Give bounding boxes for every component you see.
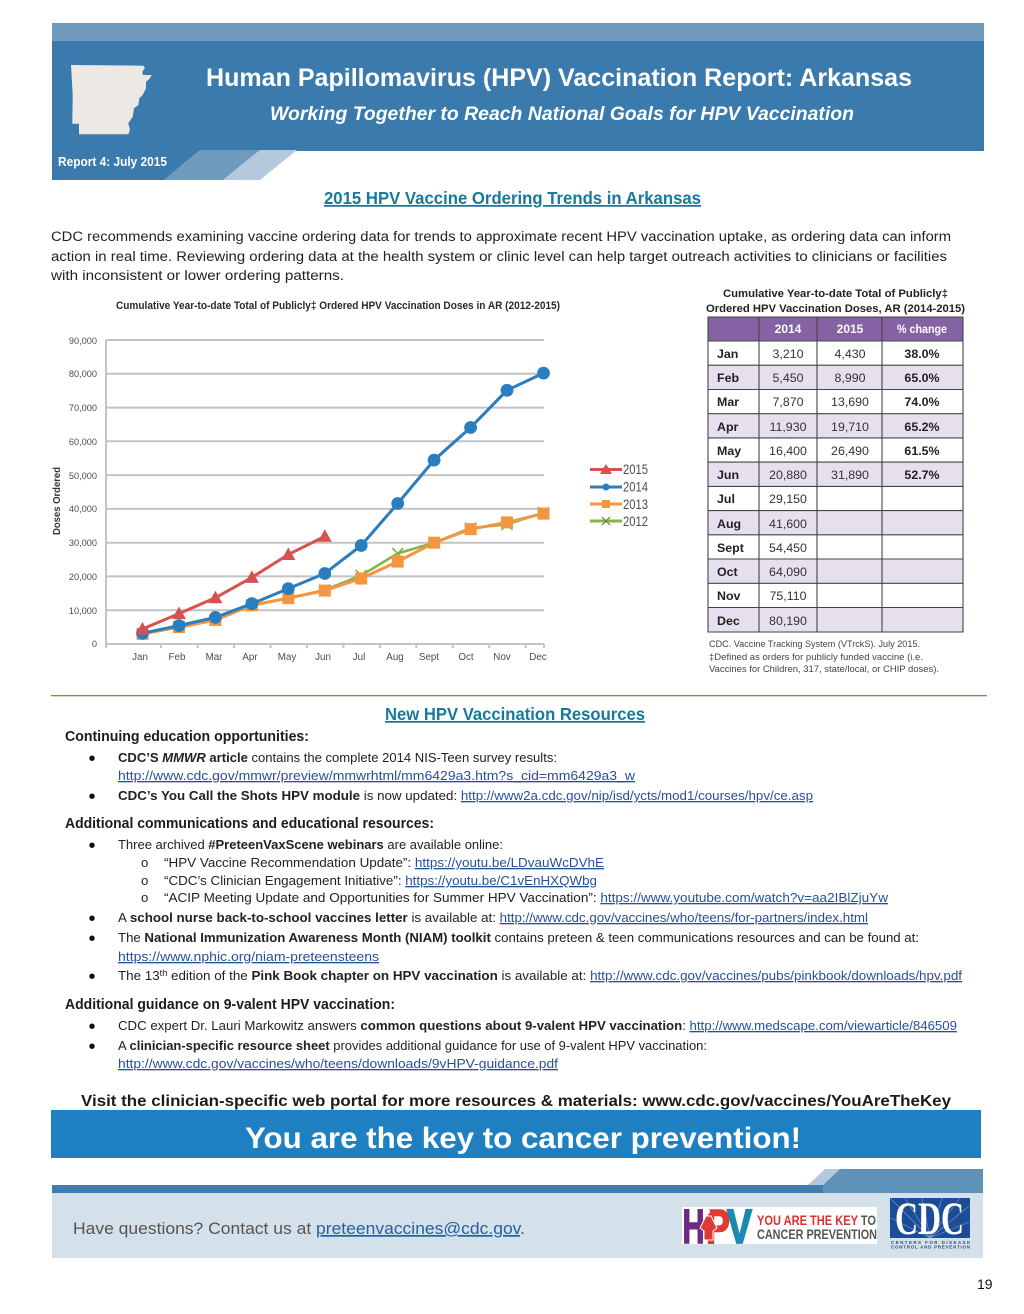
series 2014 — [142, 373, 544, 633]
resources: communications and education: Pink Book chapter on HPV vaccination is available at: http://www.cdc.gov/vaccines/pubs/pinkbook/downloads/hpv.pdf — [251, 968, 956, 983]
table rows: 7,870 — [772, 395, 804, 409]
table rows: Dec — [717, 614, 740, 628]
resources: continuing education: • — [88, 748, 96, 770]
table rows: 5,450 — [772, 371, 804, 385]
table rows: 20,880 — [769, 468, 807, 482]
y axis labels: 70,000 — [69, 403, 97, 413]
resources: communications and education: “HPV Vaccine Recommendation Update”: https://youtu.be/LDvauWcDVhE — [164, 855, 604, 870]
resources: communications and education: • — [88, 908, 96, 930]
resources: 9-valent guidance: Additional guidance on 9-valent HPV vaccination: — [65, 997, 395, 1013]
resources: communications and education — [65, 816, 962, 988]
table rows: 8,990 — [834, 371, 866, 385]
table rows: May — [717, 444, 741, 458]
y axis labels: 50,000 — [69, 471, 97, 481]
table rows: 80,190 — [769, 614, 807, 628]
logo: CDC: CENTERS FOR DISEASE — [891, 1240, 970, 1245]
footer panel — [52, 1169, 983, 1258]
table rows: 19,710 — [831, 420, 869, 434]
x axis labels: Feb — [169, 652, 186, 663]
resources: 9-valent guidance — [65, 997, 957, 1071]
resources: communications and education: • — [88, 966, 96, 988]
table rows: Nov — [717, 589, 741, 603]
logo: HPV you are the key: YOU ARE THE KEY TO — [757, 1212, 876, 1228]
logo: HPV you are the key: V — [727, 1201, 752, 1254]
x axis labels: Sept — [419, 652, 439, 663]
logo: HPV you are the key: P — [706, 1201, 730, 1254]
y axis title: Doses Ordered — [51, 467, 63, 535]
data table: 2014-2015 doses — [706, 288, 965, 674]
series 2013 — [142, 514, 544, 634]
resources: continuing education: CDC’s You Call the Shots HPV module is now updated: http://www2a.cdc.gov/nip/isd/ycts/mod1/courses/hpv/ce.asp — [118, 788, 813, 803]
table rows: 64,090 — [769, 565, 807, 579]
y axis labels: 60,000 — [69, 437, 97, 447]
header banner — [52, 23, 984, 180]
logo: CDC: CONTROL AND PREVENTION — [891, 1244, 970, 1250]
chart legend: 2015 — [623, 462, 648, 477]
resources: continuing education: • — [88, 786, 96, 808]
resources: communications and education: o — [141, 890, 148, 905]
report subtitle: Working Together to Reach National Goals for HPV Vaccination — [270, 104, 854, 125]
table rows: 65.2% — [904, 420, 940, 434]
resources: 9-valent guidance: http://www.cdc.gov/vaccines/who/teens/downloads/9vHPV-guidance.pdf — [118, 1056, 558, 1071]
table rows: 16,400 — [769, 444, 807, 458]
resources: 9-valent guidance: • — [88, 1036, 96, 1058]
x axis labels: Oct — [458, 652, 474, 663]
y axis labels: 10,000 — [69, 606, 97, 616]
y axis labels: 0 — [92, 639, 97, 649]
data table: 2014-2015 doses: 2015 — [837, 322, 864, 336]
x axis labels — [132, 652, 547, 663]
data table: 2014-2015 doses: Ordered HPV Vaccination Doses, AR (2014-2015) — [706, 303, 965, 315]
icon: person in logo — [700, 1208, 717, 1240]
resources: communications and education: edition of the — [167, 968, 251, 983]
resources: communications and education: “ACIP Meeting Update and Opportunities for Summer HPV Vaccination”: https://www.youtube.com/watch?v=aa2IBlZjuYw — [164, 890, 888, 905]
table rows: 74.0% — [904, 395, 940, 409]
slogan banner — [51, 1110, 981, 1158]
report title: Human Papillomavirus (HPV) Vaccination Report: Arkansas — [206, 64, 912, 92]
table rows: 13,690 — [831, 395, 869, 409]
table rows: 31,890 — [831, 468, 869, 482]
slogan banner: You are the key to cancer prevention! — [245, 1122, 801, 1155]
data table: 2014-2015 doses: 2014 — [775, 322, 802, 336]
table rows: 52.7% — [904, 468, 940, 482]
table rows: 41,600 — [769, 517, 807, 531]
y axis labels: 20,000 — [69, 572, 97, 582]
logo: HPV you are the key: CANCER PREVENTION — [757, 1226, 877, 1242]
x axis labels: Jan — [132, 652, 148, 663]
y axis labels: 90,000 — [69, 336, 97, 346]
resources: continuing education: Continuing education opportunities: — [65, 729, 309, 745]
resources: continuing education — [65, 729, 813, 808]
table title: Cumulative Year-to-date Total of Publicly‡ — [723, 288, 948, 300]
intro paragraph: action in real time. Reviewing ordering data at the health system or clinic level can help target outreach activities to clinicians or facilities — [51, 249, 947, 265]
table rows: 11,930 — [770, 420, 807, 434]
x axis labels: Dec — [529, 652, 547, 663]
logo: HPV you are the key — [682, 1201, 877, 1254]
table rows: 65.0% — [904, 371, 940, 385]
y axis labels: 30,000 — [69, 538, 97, 548]
resources: communications and education: th — [160, 968, 167, 978]
resources: 9-valent guidance: A clinician-specific resource sheet provides additional guidance for use of 9-valent HPV vaccination: — [118, 1038, 707, 1053]
table footnote: ‡Defined as orders for publicly funded vaccine (i.e. — [709, 651, 923, 662]
table rows: Aug — [717, 517, 741, 531]
table rows: 75,110 — [770, 589, 807, 603]
x axis labels: Aug — [386, 652, 404, 663]
y axis labels — [69, 336, 97, 649]
resources: communications and education: Three archived #PreteenVaxScene webinars are available online: — [118, 837, 503, 852]
table rows: Sept — [717, 541, 744, 555]
logo: CDC — [890, 1193, 970, 1250]
table rows — [717, 347, 940, 628]
resources: communications and education: https://www.nphic.org/niam-preteensteens — [118, 949, 379, 964]
report number and date: Report 4: July 2015 — [58, 155, 167, 169]
intro paragraph: CDC recommends examining vaccine ordering data for trends to approximate recent HPV vaccination uptake, as ordering data can inform — [51, 229, 951, 245]
resources: communications and education: “CDC’s Clinician Engagement Initiative”: https://youtu.be/C1vEnHXQWbg — [164, 873, 597, 888]
line chart: cumulative doses 2012-2015 — [51, 300, 648, 663]
icon: Arkansas state outline — [71, 65, 152, 134]
contact line: Have questions? Contact us at preteenvaccines@cdc.gov . — [73, 1219, 525, 1238]
resources: 9-valent guidance: CDC expert Dr. Lauri Markowitz answers common questions about 9-valent HPV vaccination: http://www.medscape.com/viewarticle/846509 — [118, 1018, 957, 1033]
table footnote: CDC. Vaccine Tracking System (VTrckS). July 2015. — [709, 638, 920, 649]
logo: CDC: CDC — [895, 1193, 964, 1245]
resources: communications and education: • — [88, 835, 96, 857]
x axis labels: Jun — [315, 652, 331, 663]
resources: communications and education: • — [88, 928, 96, 950]
resources: 9-valent guidance: • — [88, 1016, 96, 1038]
table rows: 4,430 — [834, 347, 866, 361]
chart title: Cumulative Year-to-date Total of Publicly‡ Ordered HPV Vaccination Doses in AR (2012-2015) — [116, 300, 560, 312]
resources: continuing education: http://www.cdc.gov/mmwr/preview/mmwrhtml/mm6429a3.htm?s_cid=mm6429a3_w — [118, 768, 635, 783]
y axis labels: 80,000 — [69, 369, 97, 379]
y axis labels: 40,000 — [69, 504, 97, 514]
section heading: ordering trends: 2015 HPV Vaccine Ordering Trends in Arkansas — [324, 188, 701, 208]
section heading: new resources: New HPV Vaccination Resources — [385, 704, 645, 724]
resources: communications and education: The National Immunization Awareness Month (NIAM) toolkit contains preteen & teen communications resources and can be found at: — [118, 930, 919, 945]
x axis labels: May — [278, 652, 296, 663]
chart legend: 2013 — [623, 497, 648, 512]
table rows: Feb — [717, 371, 739, 385]
intro paragraph: with inconsistent or lower ordering patterns. — [50, 268, 344, 284]
data table: 2014-2015 doses: % change — [897, 322, 947, 336]
series 2015 — [142, 536, 325, 629]
page number: 19 — [977, 1276, 993, 1292]
table rows: 26,490 — [831, 444, 869, 458]
table rows: 38.0% — [904, 347, 940, 361]
chart legend — [590, 462, 648, 529]
resources: communications and education: The 13 — [118, 968, 159, 983]
table rows: 29,150 — [769, 492, 807, 506]
resources: communications and education: o — [141, 855, 148, 870]
logo: HPV you are the key: H — [682, 1201, 704, 1254]
table rows: Mar — [717, 395, 739, 409]
web portal callout: Visit the clinician-specific web portal for more resources & materials: www.cdc.gov/vaccines/YouAreTheKey — [81, 1093, 951, 1110]
chart legend: 2012 — [623, 514, 648, 529]
table rows: Jun — [717, 468, 739, 482]
intro paragraph — [50, 229, 951, 284]
resources: communications and education: A school nurse back-to-school vaccines letter is available at: http://www.cdc.gov/vaccines/who/teens/for-partners/index.html — [118, 910, 868, 925]
resources: continuing education: CDC’S MMWR article contains the complete 2014 NIS-Teen survey results: — [118, 750, 557, 765]
table rows: 3,210 — [772, 347, 804, 361]
x axis labels: Apr — [242, 652, 258, 663]
table rows: 61.5% — [904, 444, 940, 458]
resources: communications and education: Additional communications and educational resources: — [65, 816, 434, 832]
x axis labels: Mar — [206, 652, 223, 663]
resources: communications and education: o — [141, 873, 148, 888]
series 2012 — [142, 513, 544, 634]
table rows: Oct — [717, 565, 738, 579]
table footnote — [709, 638, 939, 674]
table rows: Apr — [717, 420, 739, 434]
chart legend: 2014 — [623, 480, 648, 494]
x axis labels: Jul — [353, 652, 365, 663]
table footnote: Vaccines for Children, 317, state/local, or CHIP doses). — [709, 663, 939, 674]
table rows: 54,450 — [769, 541, 807, 555]
table rows: Jan — [717, 347, 738, 361]
x axis labels: Nov — [493, 652, 511, 663]
table rows: Jul — [717, 492, 735, 506]
